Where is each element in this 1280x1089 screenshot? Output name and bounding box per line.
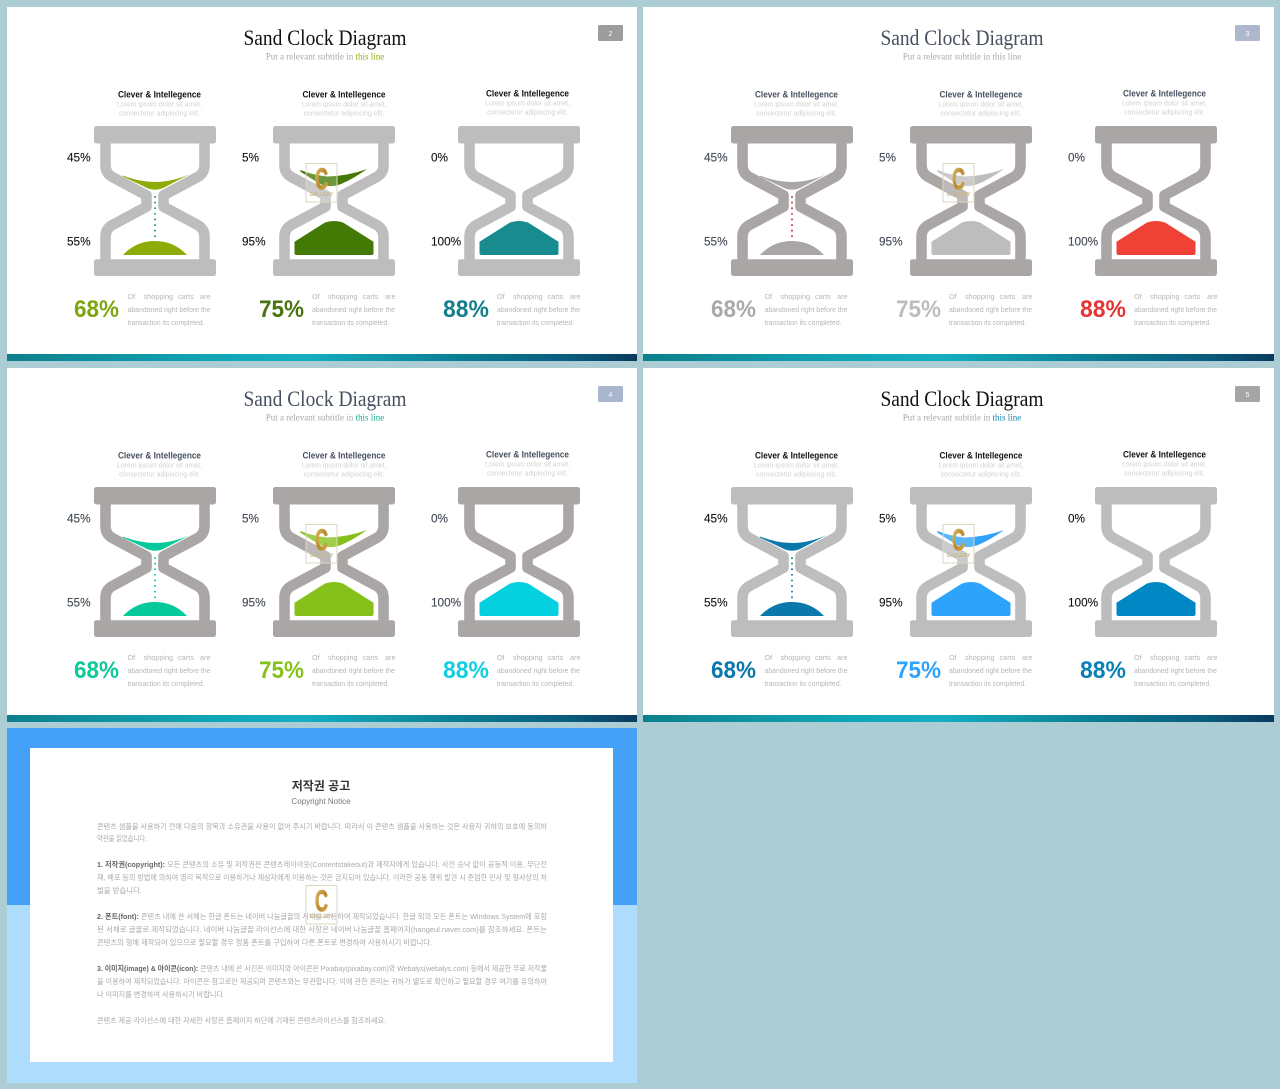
- column 2: are: [385, 292, 396, 301]
- column 1: Of: [764, 292, 773, 301]
- watermark: [306, 524, 337, 563]
- column 1: shopping: [144, 653, 173, 662]
- column 2: Clever & Intellegence: [940, 450, 1022, 460]
- column 2: 75%: [259, 657, 304, 684]
- column 1: consectetur adipiscing elit.: [756, 472, 837, 478]
- column 3: carts: [548, 653, 564, 662]
- column 1: are: [837, 292, 848, 301]
- column 2: abandoned right before the: [949, 666, 1032, 675]
- subtitle: Put a relevant subtitle in this line: [266, 412, 384, 422]
- column 2: are: [1022, 653, 1033, 662]
- column 2: [879, 90, 1033, 327]
- subtitle: Put a relevant subtitle in this line: [903, 52, 1021, 62]
- column 1: 55%: [704, 234, 728, 248]
- column 1: Of: [764, 653, 773, 662]
- section 2: font: 된 서체로 글꼴로 제작되었습니다. 네이버 나눔글꼴 라이선스에 대한 사항은 네이버 나눔글꼴 홈페이지(hangeul.naver.com)를 참조하세요. 폰트는: [97, 924, 547, 934]
- column 2: Of: [949, 653, 958, 662]
- column 2: transaction its completed.: [949, 679, 1026, 688]
- intro paragraph: [97, 821, 547, 843]
- subtitle: Put a relevant subtitle in this line: [903, 412, 1021, 422]
- column 3: abandoned right before the: [497, 666, 580, 675]
- column 1: [704, 90, 853, 327]
- page number badge: [598, 386, 623, 402]
- column 2: [879, 450, 1033, 688]
- column 1: Lorem ipsum dolor sit amet,: [754, 462, 839, 470]
- copyright subheading: Copyright Notice: [291, 797, 351, 806]
- column 1: are: [200, 292, 211, 301]
- column 2: 75%: [896, 296, 941, 323]
- column 1: carts: [178, 292, 194, 301]
- slide 5: blue sand clocks: [643, 368, 1274, 722]
- column 2: [242, 90, 396, 327]
- column 1: abandoned right before the: [764, 305, 848, 314]
- section 1: copyright: 1. 저작권(copyright): 모든 콘텐츠의 소유 및 저작권은 콘텐츠레이아웃(Contentstakeout)과 제작자에게 있습니다. 사전 승낙 없이 공동적 이용, 무단전: [97, 859, 547, 869]
- column 3: transaction its completed.: [497, 679, 574, 688]
- column 1: carts: [815, 292, 831, 301]
- column 2: Lorem ipsum dolor sit amet,: [301, 102, 387, 108]
- column 2: 5%: [879, 512, 897, 526]
- watermark: [943, 164, 974, 202]
- column 3: carts: [1184, 653, 1201, 662]
- column 3: Lorem ipsum dolor sit amet,: [485, 462, 570, 468]
- column 2: consectetur adipiscing elit.: [941, 472, 1021, 478]
- slide: copyright notice: [7, 728, 637, 1083]
- column 2: consectetur adipiscing elit.: [941, 110, 1021, 118]
- column 2: Of: [312, 653, 321, 662]
- column 1: 55%: [67, 234, 91, 248]
- column 3: transaction its completed.: [1134, 318, 1211, 327]
- column 3: abandoned right before the: [1134, 666, 1217, 675]
- column 2: [242, 450, 396, 688]
- section 3: image and icon: 나 이미지를 변경하여 사용하시기 바랍니다.: [97, 989, 225, 999]
- column 3: 100%: [1068, 234, 1099, 248]
- column 2: Lorem ipsum dolor sit amet,: [938, 462, 1024, 470]
- intro paragraph: 약관을 읽었습니다.: [97, 833, 147, 843]
- column 3: Of: [497, 653, 506, 662]
- column 2: carts: [362, 292, 379, 301]
- column 3: Clever & Intellegence: [1123, 450, 1206, 460]
- column 1: shopping: [144, 292, 173, 301]
- column 3: abandoned right before the: [1134, 305, 1217, 314]
- column 1: Lorem ipsum dolor sit amet,: [754, 102, 839, 108]
- column 1: 68%: [711, 296, 756, 323]
- column 3: carts: [548, 292, 564, 301]
- watermark: [306, 164, 337, 202]
- title: Sand Clock Diagram: [244, 386, 406, 411]
- column 1: consectetur adipiscing elit.: [119, 472, 200, 478]
- column 3: consectetur adipiscing elit.: [1124, 470, 1205, 478]
- column 2: Clever & Intellegence: [302, 450, 386, 460]
- column 1: are: [837, 653, 848, 662]
- column 2: 95%: [242, 234, 266, 248]
- column 2: carts: [1000, 292, 1016, 301]
- column 2: 75%: [259, 296, 304, 323]
- column 3: 88%: [1080, 296, 1126, 323]
- column 3: 88%: [443, 657, 489, 684]
- column 3: are: [570, 292, 581, 301]
- column 1: abandoned right before the: [128, 305, 210, 314]
- column 1: carts: [815, 653, 831, 662]
- column 1: consectetur adipiscing elit.: [756, 110, 837, 118]
- column 3: Lorem ipsum dolor sit amet,: [1122, 100, 1207, 108]
- column 3: shopping: [1150, 292, 1180, 301]
- column 2: transaction its completed.: [312, 679, 389, 688]
- column 3: 100%: [1068, 596, 1099, 610]
- column 1: consectetur adipiscing elit.: [119, 110, 200, 118]
- column 1: Clever & Intellegence: [118, 90, 201, 100]
- column 1: 68%: [74, 296, 119, 323]
- column 2: abandoned right before the: [312, 666, 395, 675]
- column 1: 45%: [704, 150, 728, 164]
- column 3: 0%: [1068, 150, 1086, 164]
- column 3: Lorem ipsum dolor sit amet,: [485, 100, 570, 108]
- column 3: shopping: [513, 653, 543, 662]
- page number badge: [1235, 386, 1260, 402]
- intro paragraph: 콘텐츠 샘플을 사용하기 전에 다음의 항목과 소유권을 사용이 없어 주시기 바랍니다. 따라서 이 콘텐츠 샘플을 사용하는 것은 사용자 귀하의 보호에 동의하: [97, 821, 547, 831]
- column 3: transaction its completed.: [497, 318, 574, 327]
- subtitle: Put a relevant subtitle in this line: [266, 52, 384, 62]
- column 2: are: [385, 653, 396, 662]
- column 2: carts: [1000, 653, 1016, 662]
- column 1: Clever & Intellegence: [118, 450, 201, 460]
- title: Sand Clock Diagram: [880, 25, 1044, 50]
- section 1: copyright: 벌을 받습니다.: [97, 885, 142, 895]
- column 1: 68%: [74, 657, 119, 684]
- section 2: font: 2. 폰트(font): 콘텐츠 내에 쓴 서체는 한글 폰트는 네이버 나눔글꼴의 서체를 사용하여 제작되었습니다. 한글 외의 모든 폰트는 Windows System에 포함: [97, 911, 547, 921]
- column 1: abandoned right before the: [764, 666, 848, 675]
- page number badge: [1235, 25, 1260, 41]
- column 1: 55%: [67, 596, 91, 610]
- column 3: are: [1207, 653, 1218, 662]
- column 3: 0%: [1068, 512, 1086, 526]
- column 2: consectetur adipiscing elit.: [304, 472, 384, 478]
- column 1: transaction its completed.: [128, 318, 204, 327]
- column 2: abandoned right before the: [949, 305, 1032, 314]
- column 1: 45%: [67, 512, 91, 526]
- column 3: 100%: [431, 234, 462, 248]
- copyright heading: 저작권 공고: [292, 778, 350, 793]
- page number badge: [598, 25, 623, 41]
- section 3: image and icon: [97, 963, 547, 999]
- column 3: carts: [1184, 292, 1201, 301]
- column 2: transaction its completed.: [312, 318, 389, 327]
- column 3: [431, 88, 581, 327]
- column 1: shopping: [780, 292, 810, 301]
- column 3: 88%: [443, 296, 489, 323]
- column 3: Of: [1134, 292, 1143, 301]
- column 3: Clever & Intellegence: [486, 88, 569, 98]
- watermark: [943, 524, 974, 563]
- column 2: 95%: [879, 596, 903, 610]
- column 2: 5%: [879, 150, 897, 164]
- page number badge: 2: [609, 31, 613, 38]
- column 1: abandoned right before the: [128, 666, 210, 675]
- column 2: Clever & Intellegence: [302, 90, 386, 100]
- column 3: 88%: [1080, 657, 1126, 684]
- column 1: are: [200, 653, 211, 662]
- column 3: [1068, 450, 1218, 688]
- column 2: carts: [362, 653, 379, 662]
- column 3: transaction its completed.: [1134, 679, 1211, 688]
- section 1: copyright: 재, 배포 등의 방법에 의하여 영리 목적으로 이용하거나 제삼자에게 이용하는 것은 금지되어 있습니다. 이러한 공동 행위 발견 시 준엄한 민사 및 형사상의 처: [97, 872, 547, 882]
- column 3: consectetur adipiscing elit.: [487, 110, 568, 116]
- column 3: [431, 450, 581, 688]
- column 2: 5%: [242, 512, 260, 526]
- column 1: transaction its completed.: [128, 679, 204, 688]
- column 3: abandoned right before the: [497, 305, 580, 314]
- closing note: 콘텐츠 제공 라이선스에 대한 자세한 사항은 홈페이지 하단에 기재된 콘텐츠라이선스를 참조하세요.: [97, 1015, 386, 1025]
- column 3: Clever & Intellegence: [1123, 88, 1206, 98]
- column 2: Lorem ipsum dolor sit amet,: [301, 462, 387, 470]
- column 2: abandoned right before the: [312, 305, 395, 314]
- slide 2: green sand clocks: [7, 7, 637, 361]
- section 1: copyright: [97, 859, 547, 895]
- column 2: shopping: [328, 292, 358, 301]
- column 3: [1068, 88, 1218, 327]
- column 2: 95%: [879, 234, 903, 248]
- column 3: are: [1207, 292, 1218, 301]
- column 2: Of: [949, 292, 958, 301]
- column 3: Clever & Intellegence: [486, 450, 569, 460]
- column 2: Lorem ipsum dolor sit amet,: [938, 102, 1024, 108]
- title: Sand Clock Diagram: [880, 386, 1044, 411]
- page number badge: 3: [1246, 31, 1250, 38]
- column 2: shopping: [965, 653, 995, 662]
- column 3: Of: [1134, 653, 1143, 662]
- section 2: font: [97, 911, 547, 947]
- column 3: 100%: [431, 596, 462, 610]
- column 3: shopping: [513, 292, 543, 301]
- column 1: shopping: [780, 653, 810, 662]
- column 3: Of: [497, 292, 506, 301]
- column 1: 45%: [67, 150, 91, 164]
- page number badge: 5: [1246, 392, 1250, 399]
- slide 4: teal and lime sand clocks: [7, 368, 637, 722]
- column 1: transaction its completed.: [764, 318, 842, 327]
- column 2: 5%: [242, 150, 260, 164]
- title: Sand Clock Diagram: [244, 25, 406, 50]
- page number badge: 4: [609, 392, 613, 399]
- column 3: shopping: [1150, 653, 1180, 662]
- column 3: 0%: [431, 150, 449, 164]
- column 2: transaction its completed.: [949, 318, 1026, 327]
- column 1: 45%: [704, 512, 728, 526]
- section 2: font: 콘텐츠의 형에 제작되어 있으므로 필요할 경우 정품 폰트를 구입하여 다른 폰트로 변경하여 사용하시기 바랍니다.: [97, 937, 432, 947]
- watermark: [306, 886, 337, 924]
- column 3: are: [570, 653, 581, 662]
- column 2: 95%: [242, 596, 266, 610]
- slide 3: grey and red sand clocks: [643, 7, 1274, 361]
- column 2: shopping: [328, 653, 358, 662]
- column 1: Of: [128, 653, 136, 662]
- column 2: consectetur adipiscing elit.: [304, 110, 384, 118]
- column 1: transaction its completed.: [764, 679, 842, 688]
- section 3: image and icon: 을 이용하여 제작되었습니다. 아이콘은 참고로만 제공되며 콘텐츠와는 무관합니다. 이에 관한 권리는 귀하가 별도로 확인하고 필요할 경우 여기를 유의하여: [97, 976, 547, 986]
- column 1: 55%: [704, 596, 728, 610]
- column 1: [67, 450, 216, 688]
- column 2: shopping: [965, 292, 995, 301]
- column 1: Lorem ipsum dolor sit amet,: [117, 462, 202, 470]
- column 1: Of: [128, 292, 136, 301]
- column 2: Clever & Intellegence: [940, 90, 1022, 100]
- column 3: consectetur adipiscing elit.: [1124, 110, 1205, 116]
- column 1: [67, 90, 216, 327]
- column 3: Lorem ipsum dolor sit amet,: [1122, 462, 1207, 468]
- column 3: 0%: [431, 512, 449, 526]
- column 1: Clever & Intellegence: [755, 450, 838, 460]
- column 1: Clever & Intellegence: [755, 90, 838, 100]
- column 1: 68%: [711, 657, 756, 684]
- column 3: consectetur adipiscing elit.: [487, 470, 568, 478]
- column 2: 75%: [896, 657, 941, 684]
- column 1: carts: [178, 653, 194, 662]
- column 2: Of: [312, 292, 321, 301]
- column 1: [704, 450, 853, 688]
- column 1: Lorem ipsum dolor sit amet,: [117, 102, 202, 108]
- column 2: are: [1022, 292, 1033, 301]
- section 3: image and icon: 3. 이미지(image) & 아이콘(icon): 콘텐츠 내에 쓴 사진은 이미지와 아이콘은 Pixabay(pixabay.com)와 Webalys(webalys.com) 등에서 제공한 무료 저작물: [97, 963, 547, 973]
